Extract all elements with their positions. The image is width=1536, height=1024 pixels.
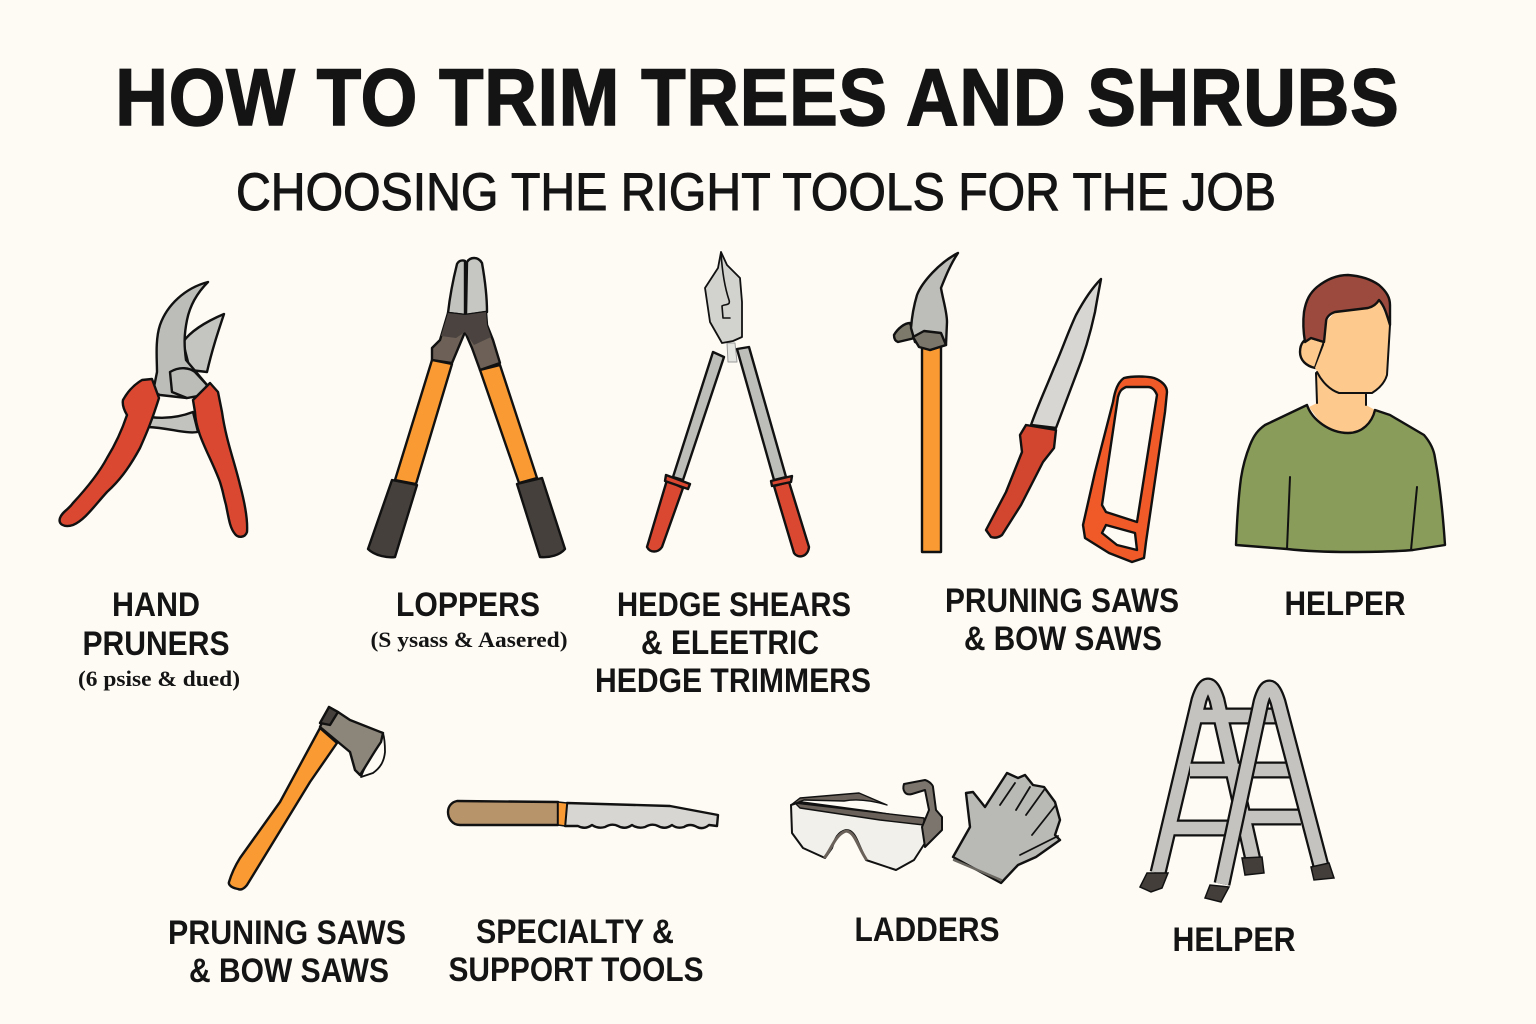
label: hand pruners: (6 psise & dued)	[78, 666, 240, 691]
label: hedge shears: HEDGE TRIMMERS	[595, 662, 871, 700]
label: helper: HELPER	[1284, 585, 1406, 623]
subtitle: CHOOSING THE RIGHT TOOLS FOR THE JOB	[236, 163, 1276, 222]
label: helper (bottom): HELPER	[1172, 921, 1296, 959]
label: hedge shears: & ELEETRIC	[641, 624, 819, 662]
label: hedge shears	[595, 586, 871, 700]
label: hand pruners	[78, 586, 240, 691]
icon: work gloves	[953, 773, 1060, 883]
icon: pruning tools	[894, 253, 1167, 562]
title: HOW TO TRIM TREES AND SHRUBS	[115, 52, 1399, 143]
label: hand pruners: PRUNERS	[82, 625, 230, 663]
label: pruning saws: PRUNING SAWS	[168, 914, 406, 952]
icon: serrated knife	[448, 801, 718, 828]
label: pruning saws: & BOW SAWS	[189, 952, 389, 990]
icon: hedge shears	[647, 252, 809, 556]
label: pruning saws	[168, 914, 406, 990]
label: hedge shears: HEDGE SHEARS	[617, 586, 851, 624]
label: specialty and support tools	[448, 913, 704, 989]
icon: hooked pruning tool	[894, 253, 958, 552]
label: loppers: LOPPERS	[396, 586, 540, 624]
icon: pruning knife	[986, 279, 1101, 538]
icon: hand pruners	[60, 282, 247, 537]
label: loppers	[370, 586, 568, 652]
label: pruning saws and bow saws	[945, 582, 1179, 658]
label: hand pruners: HAND	[112, 586, 200, 624]
icon: axe	[229, 707, 385, 890]
label: specialty and support tools: SUPPORT TOOLS	[448, 951, 704, 989]
icon: safety goggles	[791, 780, 942, 870]
label: pruning saws and bow saws: & BOW SAWS	[964, 620, 1162, 658]
icon: loppers	[368, 258, 565, 557]
icon: step ladder	[1140, 686, 1334, 902]
label: ladders: LADDERS	[854, 911, 1000, 949]
icon: bow saw	[1083, 376, 1167, 562]
icon: helper person	[1236, 275, 1445, 552]
label: specialty and support tools: SPECIALTY &	[476, 913, 674, 951]
label: loppers: (S ysass & Aasered)	[370, 627, 568, 652]
label: pruning saws and bow saws: PRUNING SAWS	[945, 582, 1179, 620]
